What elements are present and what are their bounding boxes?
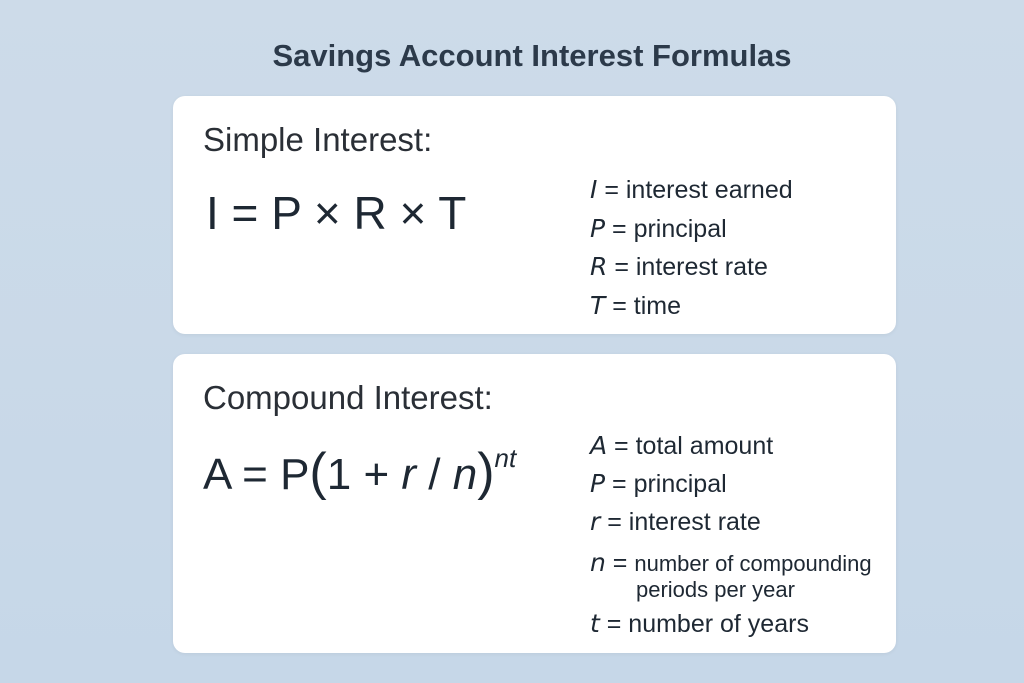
legend: simple: I = interest earned xyxy=(590,175,793,204)
title: Savings Account Interest Formulas xyxy=(272,38,792,73)
legend: compound xyxy=(588,431,872,638)
legend: simple xyxy=(590,175,793,320)
legend: simple: T = time xyxy=(590,290,681,320)
formula: compound: A = P(1 + r / n)nt xyxy=(203,443,516,501)
legend: simple: R = interest rate xyxy=(590,252,768,281)
panel: simple interest xyxy=(173,96,896,334)
heading: simple interest: Simple Interest: xyxy=(203,121,432,158)
panel: compound interest: P = principal xyxy=(590,469,727,498)
formula: simple: I = P × R × T xyxy=(206,187,466,239)
heading: compound interest: Compound Interest: xyxy=(203,379,493,416)
panel: compound interest: A = total amount xyxy=(590,431,773,460)
panel: compound interest: n = number of compounding xyxy=(590,548,872,577)
panel: compound interest: periods per year xyxy=(636,577,795,602)
legend: simple: P = principal xyxy=(590,214,727,242)
panel: compound interest xyxy=(173,354,896,653)
panel: compound interest: r = interest rate xyxy=(590,507,761,536)
panel: compound interest: t = number of years xyxy=(590,609,809,638)
